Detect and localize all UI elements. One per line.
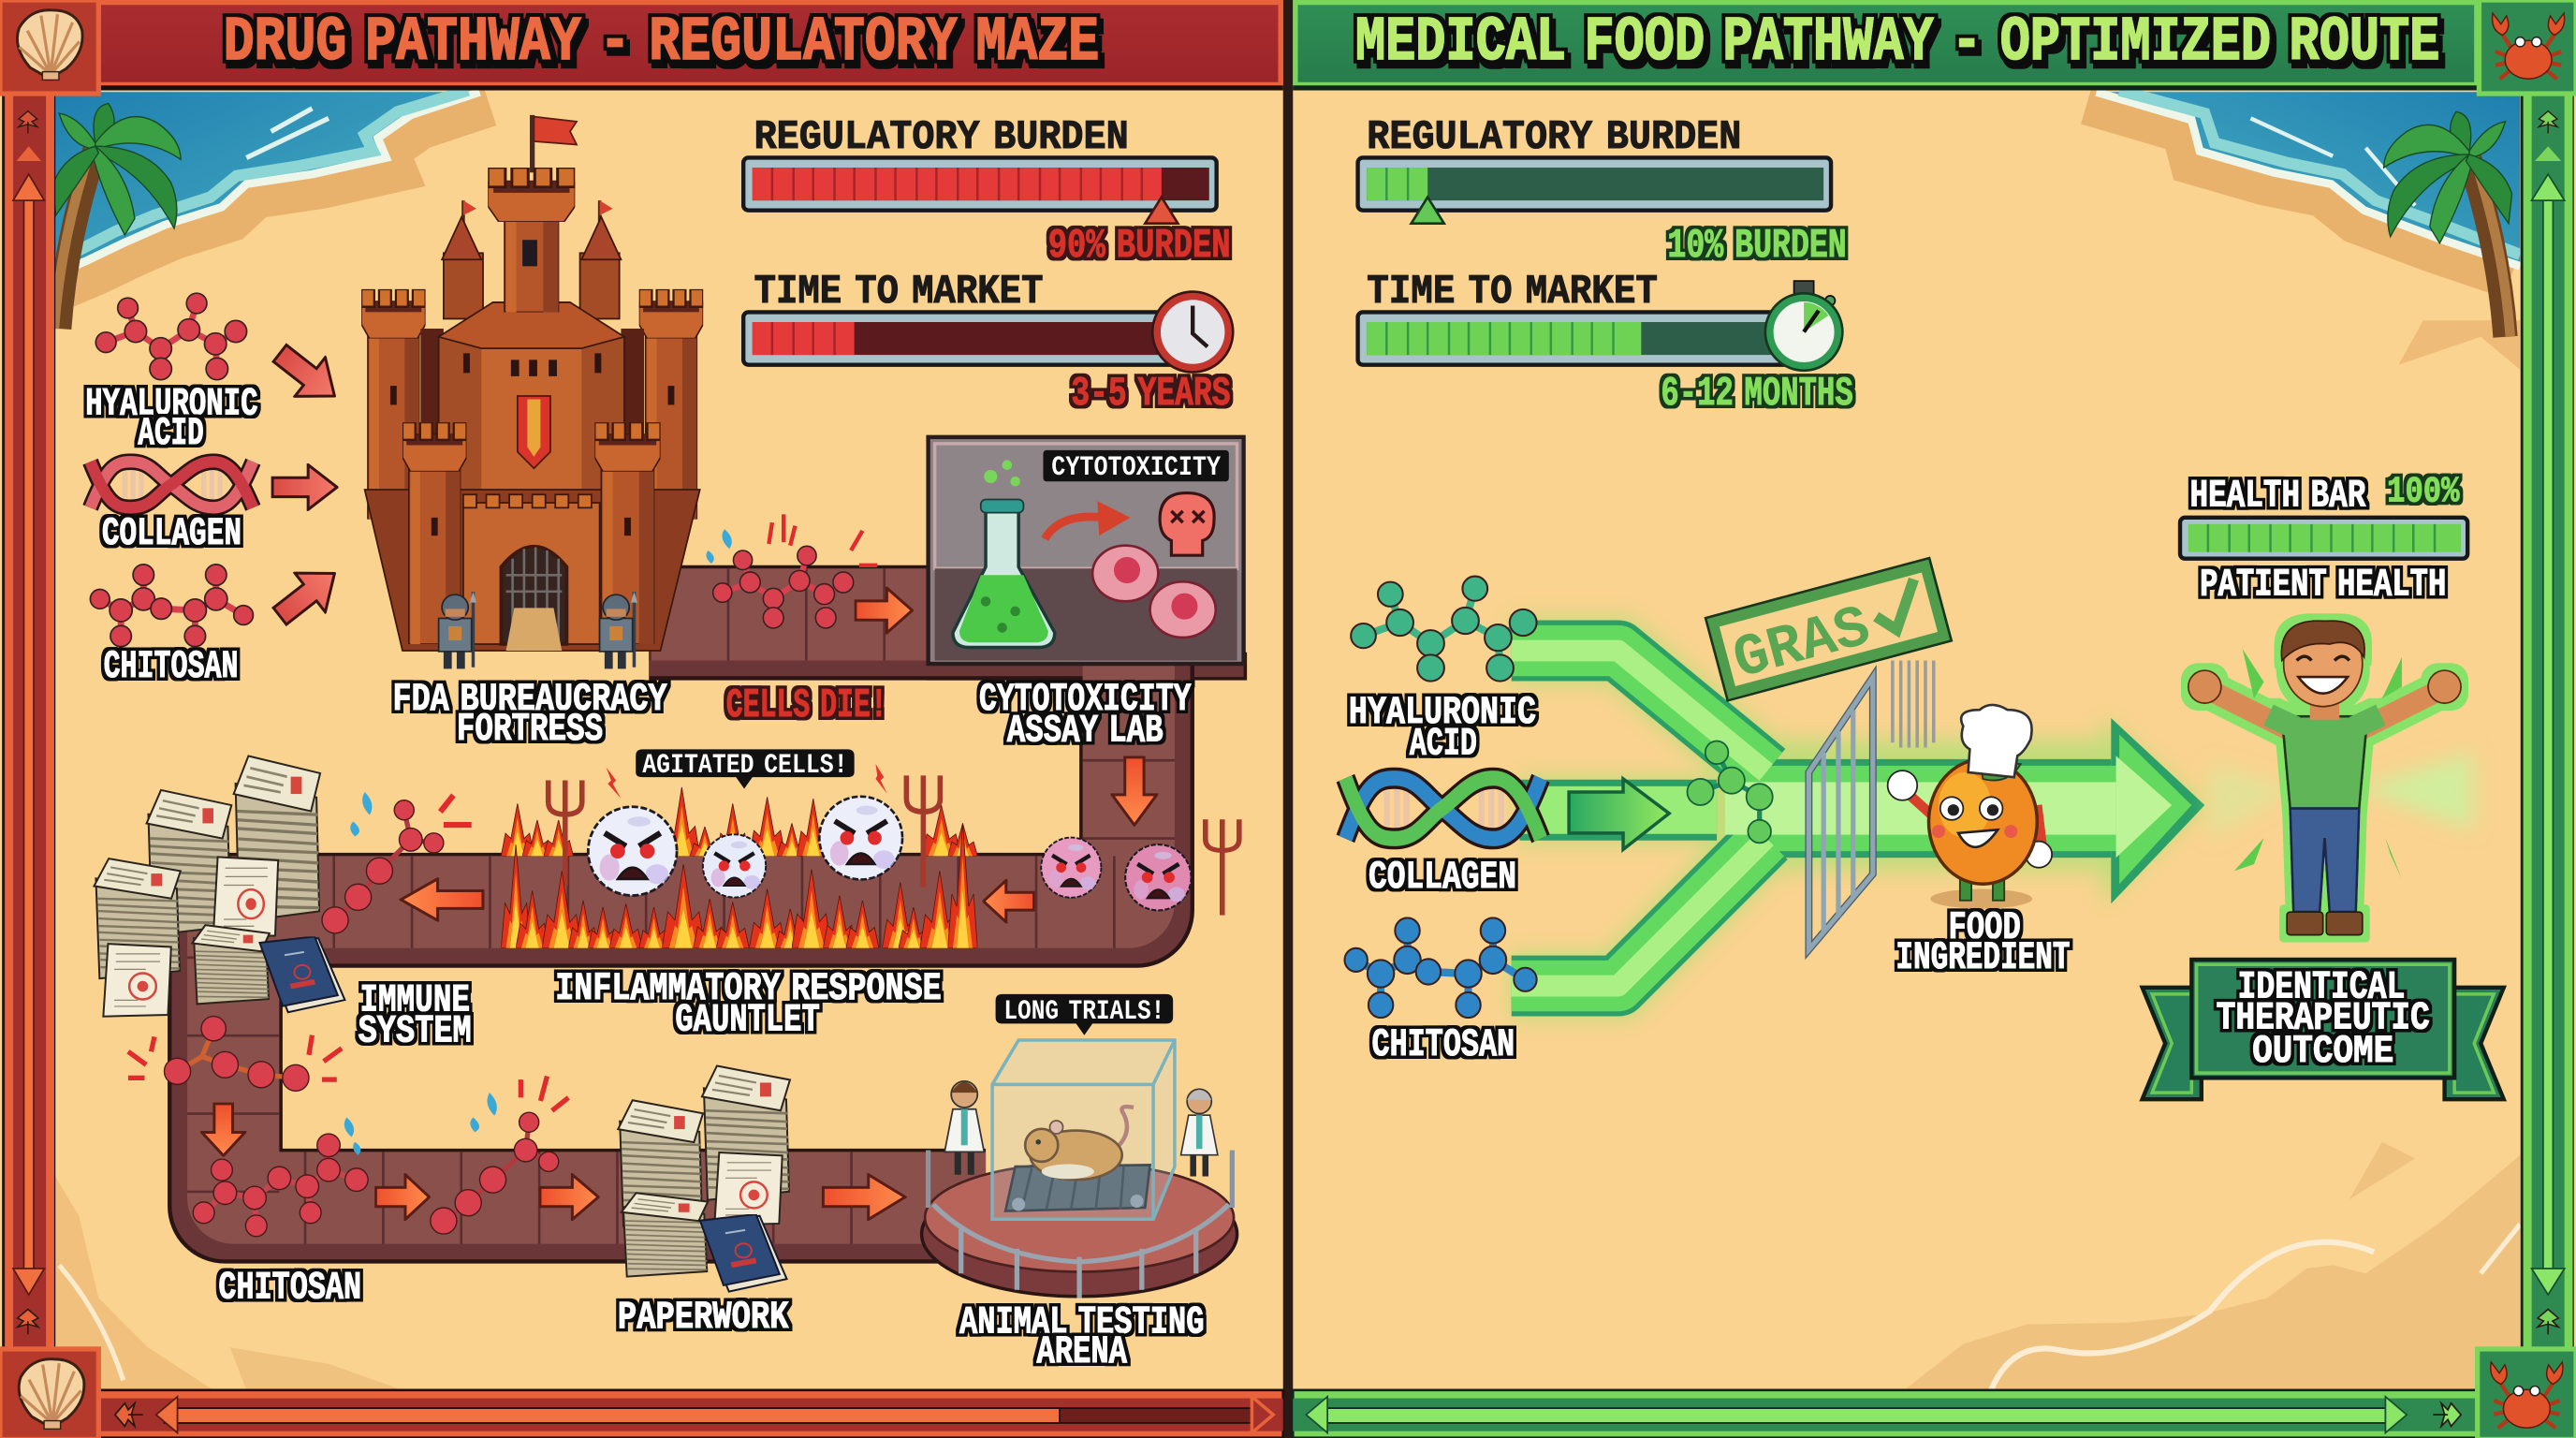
- arrow right 1: [375, 1175, 430, 1220]
- scientist right: [1181, 1089, 1218, 1177]
- badge: agitated cells: [636, 749, 855, 788]
- progress: regulatory burden food: 10% BURDEN: [1667, 223, 1847, 270]
- flames: inflammatory gauntlet front row: [501, 823, 977, 948]
- label: inflammatory response gauntlet: GAUNTLET: [675, 997, 820, 1042]
- left rail: drug: [4, 92, 54, 1390]
- label: collagen: COLLAGEN: [102, 511, 242, 556]
- health bar: 100%: [2387, 471, 2460, 512]
- sparkles around patient: [2234, 649, 2402, 879]
- progress: time to market food: 6-12 MONTHS: [1661, 371, 1853, 418]
- pink cell left: [1041, 838, 1101, 898]
- label: hyaluronic acid: [85, 381, 258, 456]
- icon: crab bottom-right: [2491, 1362, 2563, 1428]
- header: drug pathway: DRUG PATHWAY - REGULATORY MAZE: [224, 7, 1099, 79]
- label: cells die: CELLS DIE!: [726, 682, 887, 729]
- badge: agitated cells: AGITATED CELLS!: [642, 749, 848, 781]
- header: drug pathway: [0, 0, 1283, 94]
- label: immune system: IMMUNE: [359, 977, 470, 1022]
- label: FDA bureaucracy fortress: [392, 677, 667, 752]
- label: inflammatory response gauntlet: [555, 966, 942, 1042]
- arrow left to immune system: [401, 879, 483, 920]
- icon: skull: [1160, 493, 1214, 555]
- GRAS sign: [1705, 558, 1952, 700]
- progress: time to market drug: [743, 269, 1233, 418]
- progress: regulatory burden food: [1358, 114, 1847, 270]
- gate hatch: [1893, 661, 1934, 748]
- glass cage: [992, 1040, 1175, 1219]
- arrow: collagen to pathway: [1569, 779, 1669, 849]
- badge: cytotoxicity: CYTOTOXICITY: [1051, 451, 1221, 483]
- icon: shell bottom-left: [19, 1359, 84, 1429]
- paperwork pile lower: [618, 1066, 790, 1292]
- molecule: chain vertical road: [128, 1017, 342, 1091]
- dying cells: [1092, 546, 1216, 638]
- label: chitosan: CHITOSAN: [104, 644, 238, 689]
- label: animal testing arena: ANIMAL TESTING: [959, 1299, 1204, 1344]
- inflammatory cell large left: [588, 807, 677, 896]
- label: hyaluronic acid: HYALURONIC: [85, 381, 258, 426]
- input molecule: collagen: [91, 462, 253, 507]
- banner: identical therapeutic outcome: IDENTICAL: [2237, 964, 2405, 1009]
- progress: time to market drug: 3-5 YEARS: [1071, 371, 1231, 418]
- label: FDA bureaucracy fortress: FORTRESS: [457, 707, 603, 752]
- down arrow to gauntlet: [1112, 757, 1157, 825]
- arrows into fortress: [265, 334, 350, 636]
- treadmill: [1005, 1165, 1150, 1211]
- panel: drug pathway: [52, 91, 1245, 1390]
- trident far right: [1206, 819, 1239, 916]
- label: cytotoxicity assay lab: CYTOTOXICITY: [979, 677, 1192, 722]
- trident left: [549, 780, 582, 886]
- health bar: [2180, 471, 2467, 607]
- label: hyaluronic acid food: ACID: [1410, 722, 1477, 767]
- progress: time to market food: TIME TO MARKET: [1367, 269, 1658, 315]
- road path: [225, 614, 1245, 1206]
- input molecule: collagen green: [1345, 778, 1541, 839]
- bottom rail: food: [1293, 1349, 2576, 1438]
- icon: palm tree: [52, 104, 181, 329]
- food ingredient mascot: [1888, 705, 2052, 909]
- merging green pathway with arrow: [1512, 651, 2204, 986]
- label: chitosan bottom: CHITOSAN: [218, 1266, 361, 1311]
- beach scene: top-left water: [54, 91, 490, 287]
- open gate: [1808, 677, 1873, 949]
- sand patches bottom-left: [54, 1175, 402, 1390]
- guard right: [600, 592, 637, 668]
- sand patches bottom-right: [1904, 1142, 2520, 1390]
- arrow left after gauntlet: [984, 880, 1034, 922]
- banner: identical therapeutic outcome: THERAPEUTIC: [2217, 996, 2430, 1041]
- label: food ingredient: INGREDIENT: [1895, 935, 2070, 980]
- molecule on road 1 with alarm marks: [706, 514, 877, 628]
- label: food ingredient: [1895, 905, 2070, 980]
- icon: stopwatch: [1765, 281, 1842, 371]
- input molecule: hyaluronic acid green: [1351, 577, 1537, 682]
- health bar: HEALTH BAR: [2190, 474, 2366, 519]
- icon: flask: [953, 460, 1055, 648]
- beach scene: top-right water: [2086, 91, 2520, 279]
- panel: cytotoxicity lab: [929, 437, 1244, 664]
- inflammatory cell large right: [819, 797, 902, 879]
- label: immune system: [359, 977, 472, 1054]
- bottom rail: drug: [0, 1349, 1283, 1438]
- label: cytotoxicity assay lab: ASSAY LAB: [1007, 709, 1164, 754]
- label: hyaluronic acid: ACID: [138, 411, 204, 456]
- guard left: [439, 592, 476, 668]
- energy rays from patient: [2210, 753, 2472, 838]
- label: immune system: SYSTEM: [359, 1009, 472, 1054]
- label: chitosan food: CHITOSAN: [1372, 1022, 1515, 1067]
- input molecule: hyaluronic acid: [95, 293, 247, 380]
- arrow right 3: [823, 1175, 905, 1220]
- icon: shell top-left: [17, 10, 82, 80]
- progress: regulatory burden drug: [743, 114, 1231, 270]
- banner: identical therapeutic outcome: OUTCOME: [2252, 1029, 2393, 1074]
- arrow to lab: [856, 588, 913, 633]
- label: inflammatory response gauntlet: INFLAMMATORY RESPONSE: [555, 966, 942, 1011]
- banner: identical therapeutic outcome: [2143, 960, 2504, 1099]
- animal testing arena: [922, 1040, 1237, 1299]
- label: FDA bureaucracy fortress: FDA BUREAUCRACY: [392, 677, 667, 722]
- icon: crab top-right: [2493, 13, 2565, 79]
- badge: long trials: LONG TRIALS!: [1003, 995, 1164, 1027]
- flames: inflammatory gauntlet back row: [501, 764, 977, 856]
- arrow down left road: [202, 1104, 245, 1155]
- badge: long trials: [996, 994, 1173, 1035]
- progress: regulatory burden drug: REGULATORY BURDEN: [754, 114, 1129, 161]
- trident centre-right: [906, 775, 940, 888]
- progress: regulatory burden drug: 90% BURDEN: [1048, 223, 1231, 270]
- label: cytotoxicity assay lab: [979, 677, 1192, 754]
- center divider: [1283, 0, 1293, 1438]
- label: hyaluronic acid food: [1349, 690, 1536, 767]
- icon: clock: [1152, 292, 1233, 373]
- panel: medical food pathway: [1345, 91, 2520, 1390]
- molecule: chitosan on road: [193, 1117, 368, 1237]
- label: collagen food: COLLAGEN: [1368, 855, 1516, 900]
- input molecule: chitosan blue-green: [1345, 917, 1537, 1018]
- arrow right 2: [540, 1175, 598, 1220]
- label: food ingredient: FOOD: [1949, 905, 2021, 950]
- small molecule in pathway: [1687, 741, 1773, 843]
- progress: regulatory burden food: REGULATORY BURDEN: [1367, 114, 1741, 161]
- paperwork pile upper-left: [94, 756, 344, 1017]
- icon: palm tree right: [2384, 111, 2512, 337]
- health bar: PATIENT HEALTH: [2200, 562, 2446, 607]
- progress: time to market drug: TIME TO MARKET: [754, 269, 1043, 315]
- sand shadow under palm: [2398, 320, 2520, 370]
- molecule: stressed chain on road: [322, 792, 472, 933]
- castle: FDA bureaucracy fortress: [361, 115, 703, 651]
- label: animal testing arena: ARENA: [1036, 1329, 1128, 1374]
- inflammatory cell small: [703, 834, 766, 898]
- molecule: stressed chain bottom: [431, 1077, 568, 1234]
- progress: time to market food: [1358, 269, 1853, 418]
- label: animal testing arena: [959, 1299, 1204, 1374]
- input molecule: chitosan: [90, 565, 253, 647]
- scientist left: [944, 1081, 984, 1175]
- GRAS sign: GRAS: [1726, 594, 1877, 695]
- right rail: food: [2522, 92, 2572, 1390]
- icon: rat: [1025, 1107, 1134, 1180]
- arrow: flask to skull: [1045, 501, 1131, 539]
- label: paperwork: PAPERWORK: [618, 1295, 789, 1340]
- patient character: [2188, 621, 2461, 935]
- pink cell right: [1125, 844, 1192, 910]
- label: hyaluronic acid food: HYALURONIC: [1349, 690, 1536, 735]
